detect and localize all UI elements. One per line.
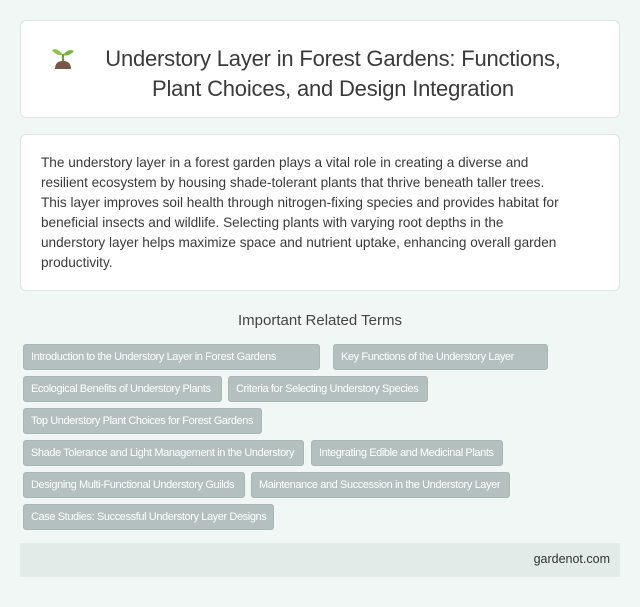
tags: Criteria for Selecting Understory Species xyxy=(236,383,418,395)
tags: Top Understory Plant Choices for Forest Gardens xyxy=(31,415,253,427)
tags: Key Functions of the Understory Layer xyxy=(341,351,514,363)
tags: Designing Multi-Functional Understory Guilds xyxy=(31,479,234,491)
icon: seedling xyxy=(52,49,74,69)
description card xyxy=(20,134,620,291)
tags: Case Studies: Successful Understory Layer Designs xyxy=(31,511,266,523)
footer text: gardenot.com xyxy=(534,552,610,566)
tags: Introduction to the Understory Layer in Forest Gardens xyxy=(31,351,276,363)
tags: Maintenance and Succession in the Understory Layer xyxy=(259,479,500,491)
header card xyxy=(20,20,620,118)
title: Understory Layer in Forest Gardens: Functions, Plant Choices, and Design Integration xyxy=(105,46,561,101)
heading: related terms: Important Related Terms xyxy=(238,312,402,329)
tags: Ecological Benefits of Understory Plants xyxy=(31,383,211,395)
tags: Shade Tolerance and Light Management in the Understory xyxy=(31,447,294,459)
footer xyxy=(20,543,620,577)
tags: Integrating Edible and Medicinal Plants xyxy=(319,447,494,459)
description text: The understory layer in a forest garden plays a vital role in creating a diverse and resilient ecosystem by housing shade-tolerant plants that thrive beneath taller trees. This layer improves soil health through nitrogen-fixing species and provides habitat for beneficial insects and wildlife. Selecting plants with varying root depths in the understory layer helps maximize space and nutrient uptake, enhancing overall garden productivity. xyxy=(41,155,559,270)
